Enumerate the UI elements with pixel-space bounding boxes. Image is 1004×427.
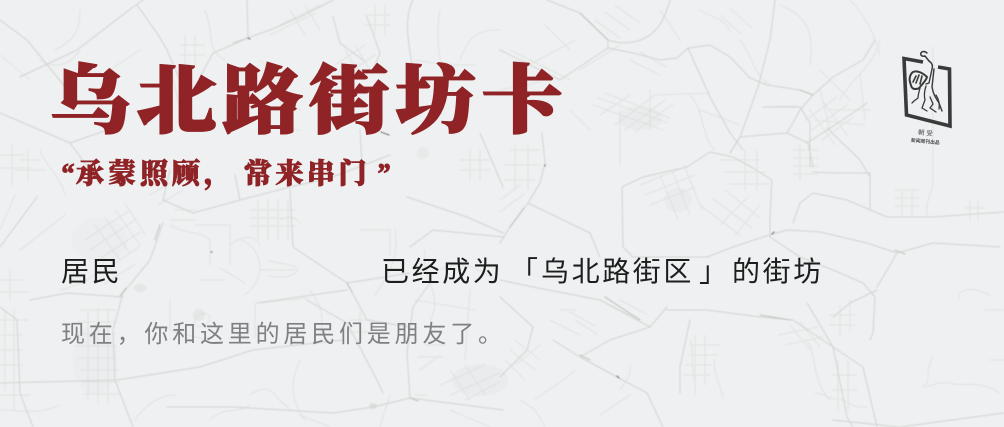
stamp caption: 新闻周刊出品 bbox=[911, 137, 940, 146]
subtitle slogan bbox=[60, 158, 394, 191]
subtitle slogan: ” bbox=[376, 159, 394, 190]
title: 乌北路街坊卡 bbox=[50, 61, 568, 143]
stamp caption bbox=[911, 127, 940, 146]
subtitle slogan: 常来串门 bbox=[244, 159, 370, 190]
stamp figure bbox=[910, 52, 942, 112]
friendship sentence: 现在，你和这里的居民们是朋友了。 bbox=[61, 321, 506, 348]
resident statement line: 已经成为 bbox=[381, 256, 503, 287]
resident statement line: 居民 bbox=[61, 256, 122, 287]
subtitle slogan: 承蒙照顾， bbox=[76, 159, 236, 190]
subtitle slogan: “ bbox=[60, 159, 78, 190]
resident statement line: 乌北路街区 bbox=[541, 256, 694, 287]
stamp caption: 朝 受 bbox=[918, 127, 934, 138]
resident statement line: 「 bbox=[510, 256, 541, 287]
resident statement line: 」 bbox=[699, 256, 730, 287]
resident statement line: 的街坊 bbox=[732, 256, 824, 287]
stamp frame bbox=[904, 58, 950, 126]
